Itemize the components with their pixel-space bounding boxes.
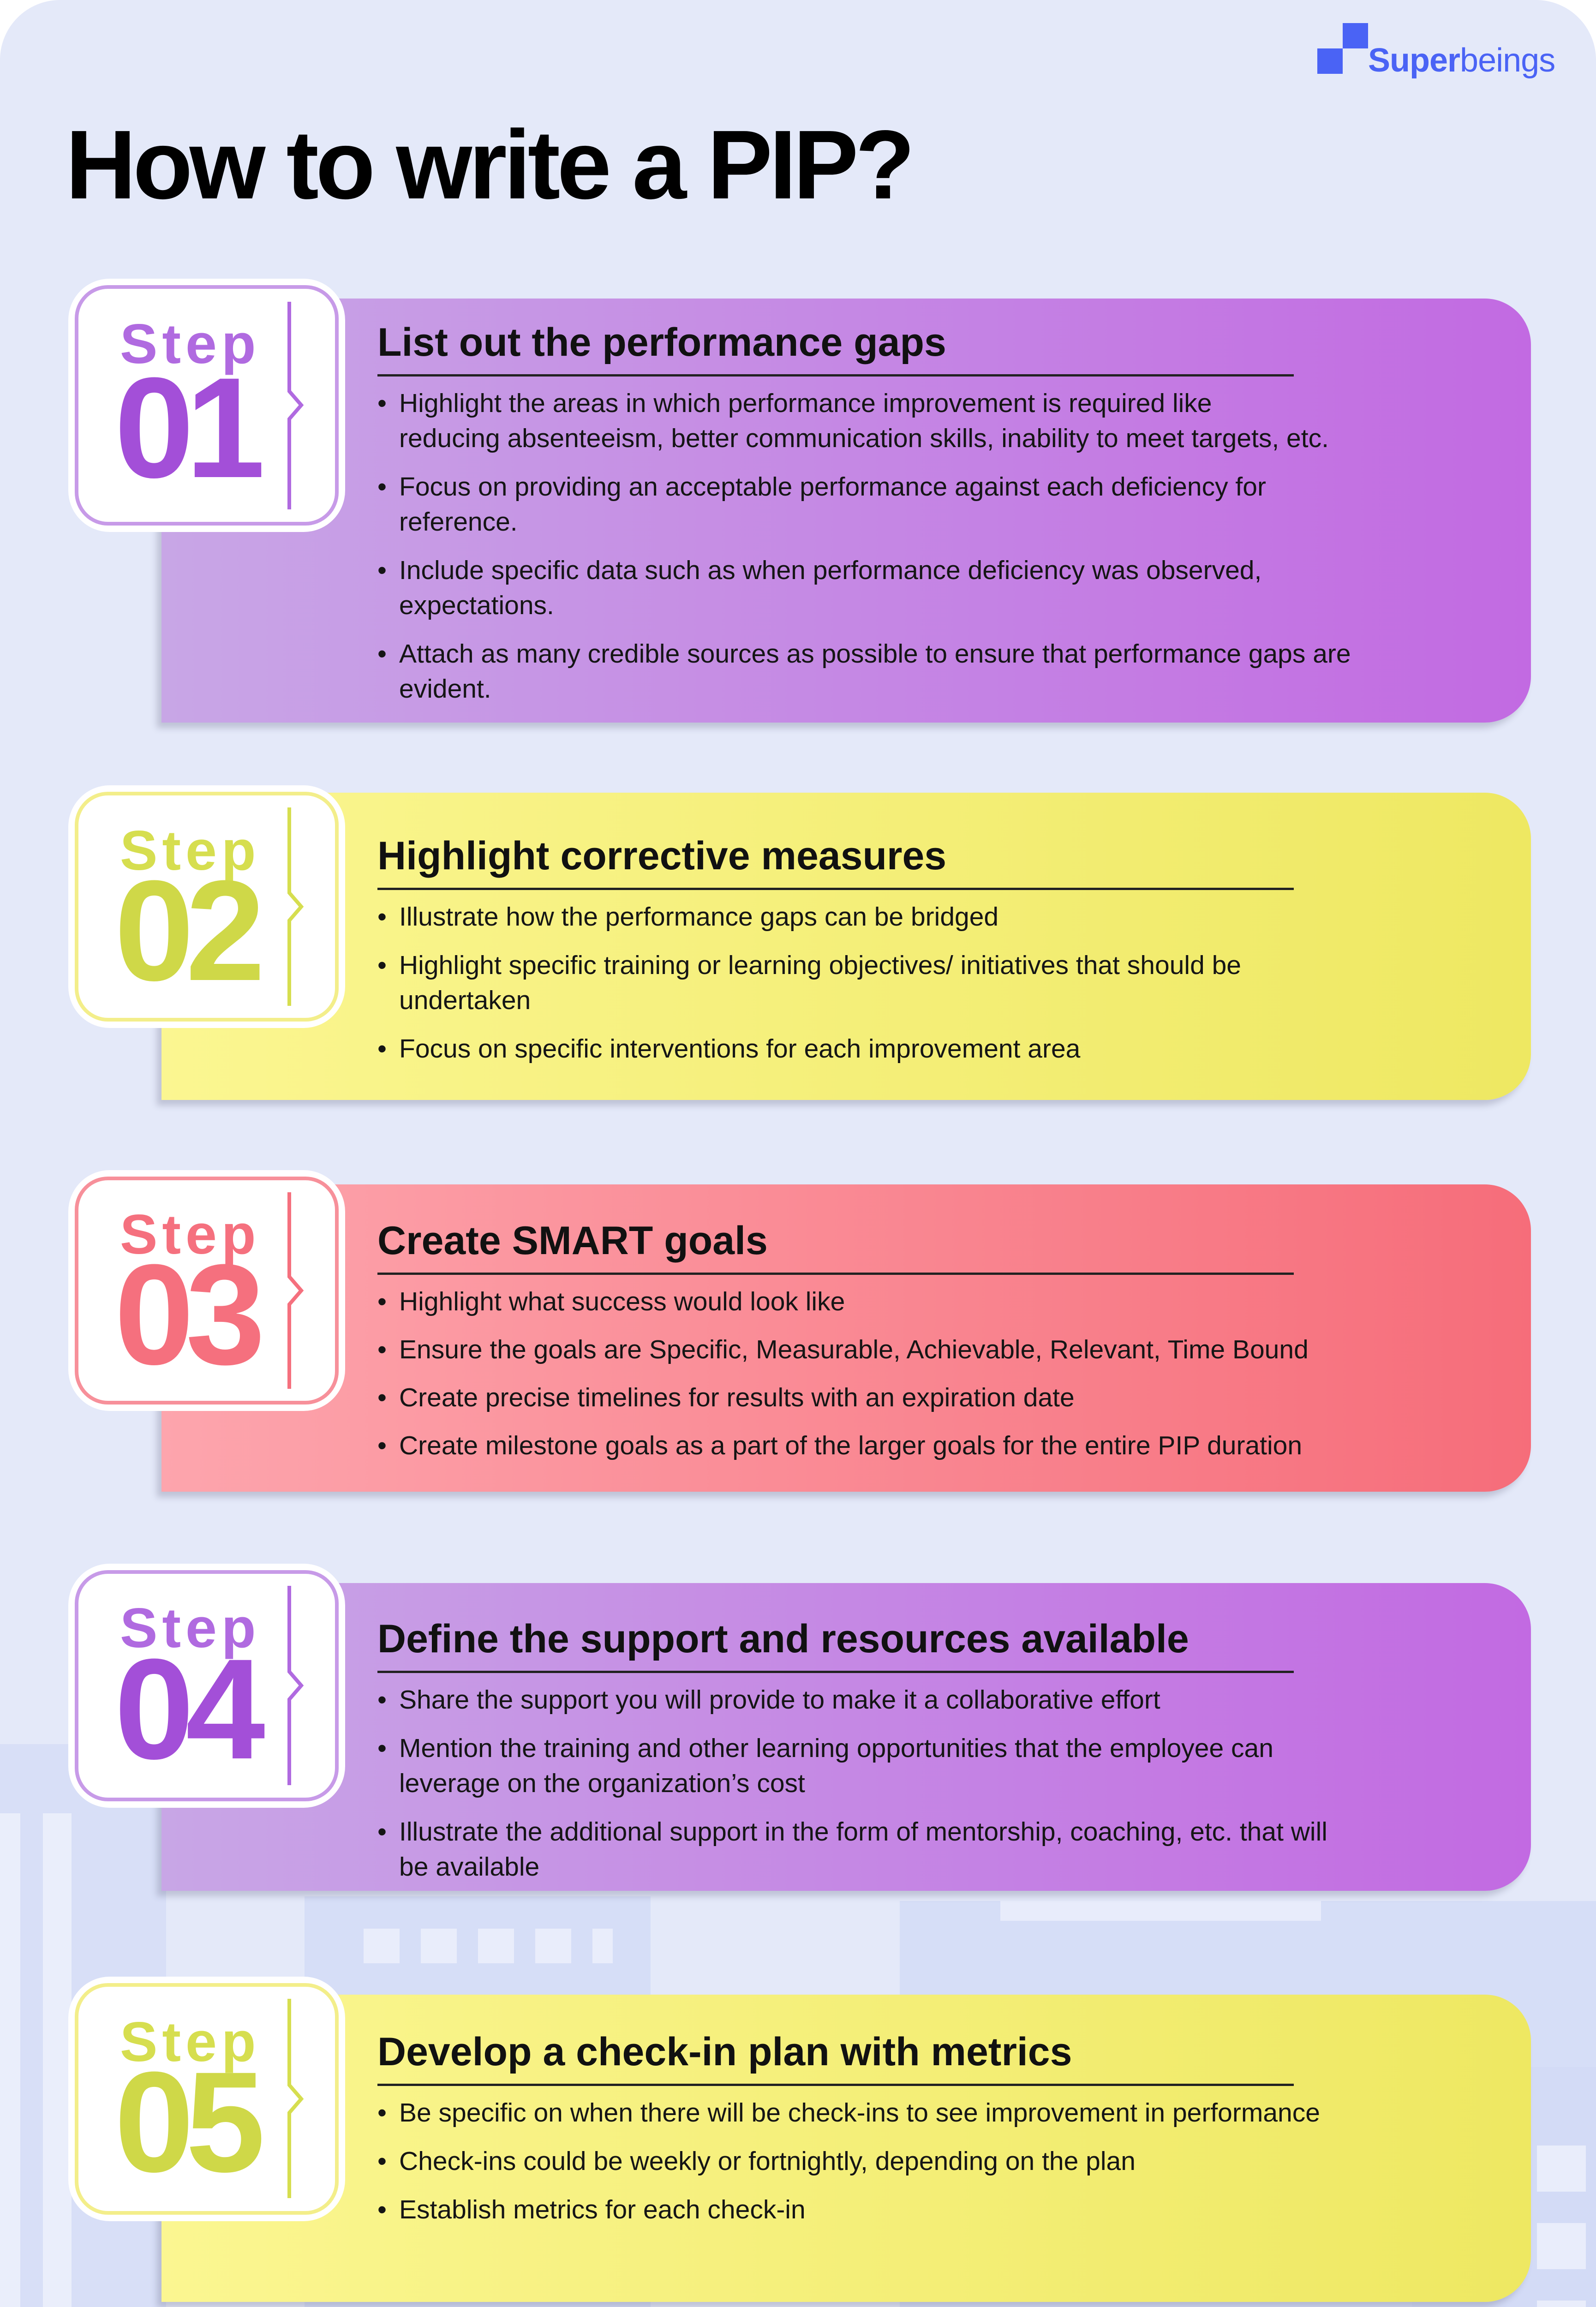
text block step 1 (377, 323, 1508, 706)
text block step 3: Create precise timelines for results with an expiration date (399, 1383, 1075, 1412)
text block step 3 (377, 1221, 1508, 1463)
text block step 3: Create milestone goals as a part of the larger goals for the entire PIP duration (399, 1431, 1302, 1460)
text block step 1: expectations. (399, 591, 554, 620)
text block step 4 (377, 1619, 1508, 1884)
text block step 4: Share the support you will provide to make it a collaborative effort (399, 1685, 1160, 1715)
text block step 5: Check-ins could be weekly or fortnightly, depending on the plan (399, 2146, 1136, 2176)
text block step 5: Develop a check-in plan with metrics (377, 2030, 1072, 2074)
logo: Superbeings (1368, 42, 1555, 79)
panel: step 4 (68, 1564, 1531, 1891)
step box 02 (68, 785, 345, 1028)
text block step 2: Focus on specific interventions for each improvement area (399, 1034, 1080, 1064)
step box 04: Step (120, 1596, 260, 1659)
text block step 1: Focus on providing an acceptable performance against each deficiency for (399, 472, 1266, 502)
text block step 1: Include specific data such as when performance deficiency was observed, (399, 556, 1261, 585)
text block step 4: Illustrate the additional support in the form of mentorship, coaching, etc. that will (399, 1817, 1327, 1847)
panel: step 5 (68, 1977, 1531, 2302)
step box 04 (68, 1564, 345, 1808)
step box 05: 05 (114, 2042, 257, 2202)
step box 03: 03 (114, 1234, 257, 1394)
text block step 5: Establish metrics for each check-in (399, 2195, 806, 2224)
text block step 1: List out the performance gaps (377, 320, 946, 365)
background buildings (0, 1744, 1596, 2307)
text block step 4: Mention the training and other learning opportunities that the employee can (399, 1733, 1273, 1763)
step box 04: 04 (114, 1629, 257, 1789)
text block step 5 (377, 2032, 1508, 2227)
text block step 2: Highlight specific training or learning objectives/ initiatives that should be (399, 950, 1241, 980)
logo (1317, 23, 1576, 83)
text block step 4: Define the support and resources available (377, 1617, 1189, 1661)
step box 05 (68, 1977, 345, 2221)
text block step 4: be available (399, 1852, 539, 1882)
text block step 1: evident. (399, 674, 491, 704)
step box 02: Step (120, 819, 260, 882)
panel: step 1 (68, 279, 1531, 723)
step box 03 (68, 1170, 345, 1411)
step box 05: Step (120, 2010, 260, 2073)
title: How to write a PIP? (66, 110, 912, 219)
text block step 1: Highlight the areas in which performance improvement is required like (399, 388, 1212, 418)
step box 02: 02 (114, 850, 257, 1010)
text block step 3: Ensure the goals are Specific, Measurable, Achievable, Relevant, Time Bound (399, 1335, 1309, 1364)
step box 03: Step (120, 1203, 260, 1266)
text block step 2: Highlight corrective measures (377, 834, 946, 878)
text block step 2 (377, 836, 1508, 1066)
text block step 1: reference. (399, 507, 518, 537)
step box 01: Step (120, 312, 260, 375)
panel: step 2 (68, 785, 1531, 1100)
text block step 1: reducing absenteeism, better communication skills, inability to meet targets, etc. (399, 424, 1329, 453)
text block step 4: leverage on the organization’s cost (399, 1769, 805, 1798)
text block step 3: Create SMART goals (377, 1219, 768, 1263)
step box 01: 01 (114, 347, 257, 508)
text block step 1: Attach as many credible sources as possible to ensure that performance gaps are (399, 639, 1351, 669)
panel: step 3 (68, 1170, 1531, 1492)
text block step 5: Be specific on when there will be check-ins to see improvement in performance (399, 2098, 1320, 2128)
text block step 2: Illustrate how the performance gaps can be bridged (399, 902, 998, 932)
step box 01 (68, 279, 345, 532)
text block step 2: undertaken (399, 986, 531, 1015)
text block step 3: Highlight what success would look like (399, 1287, 845, 1316)
